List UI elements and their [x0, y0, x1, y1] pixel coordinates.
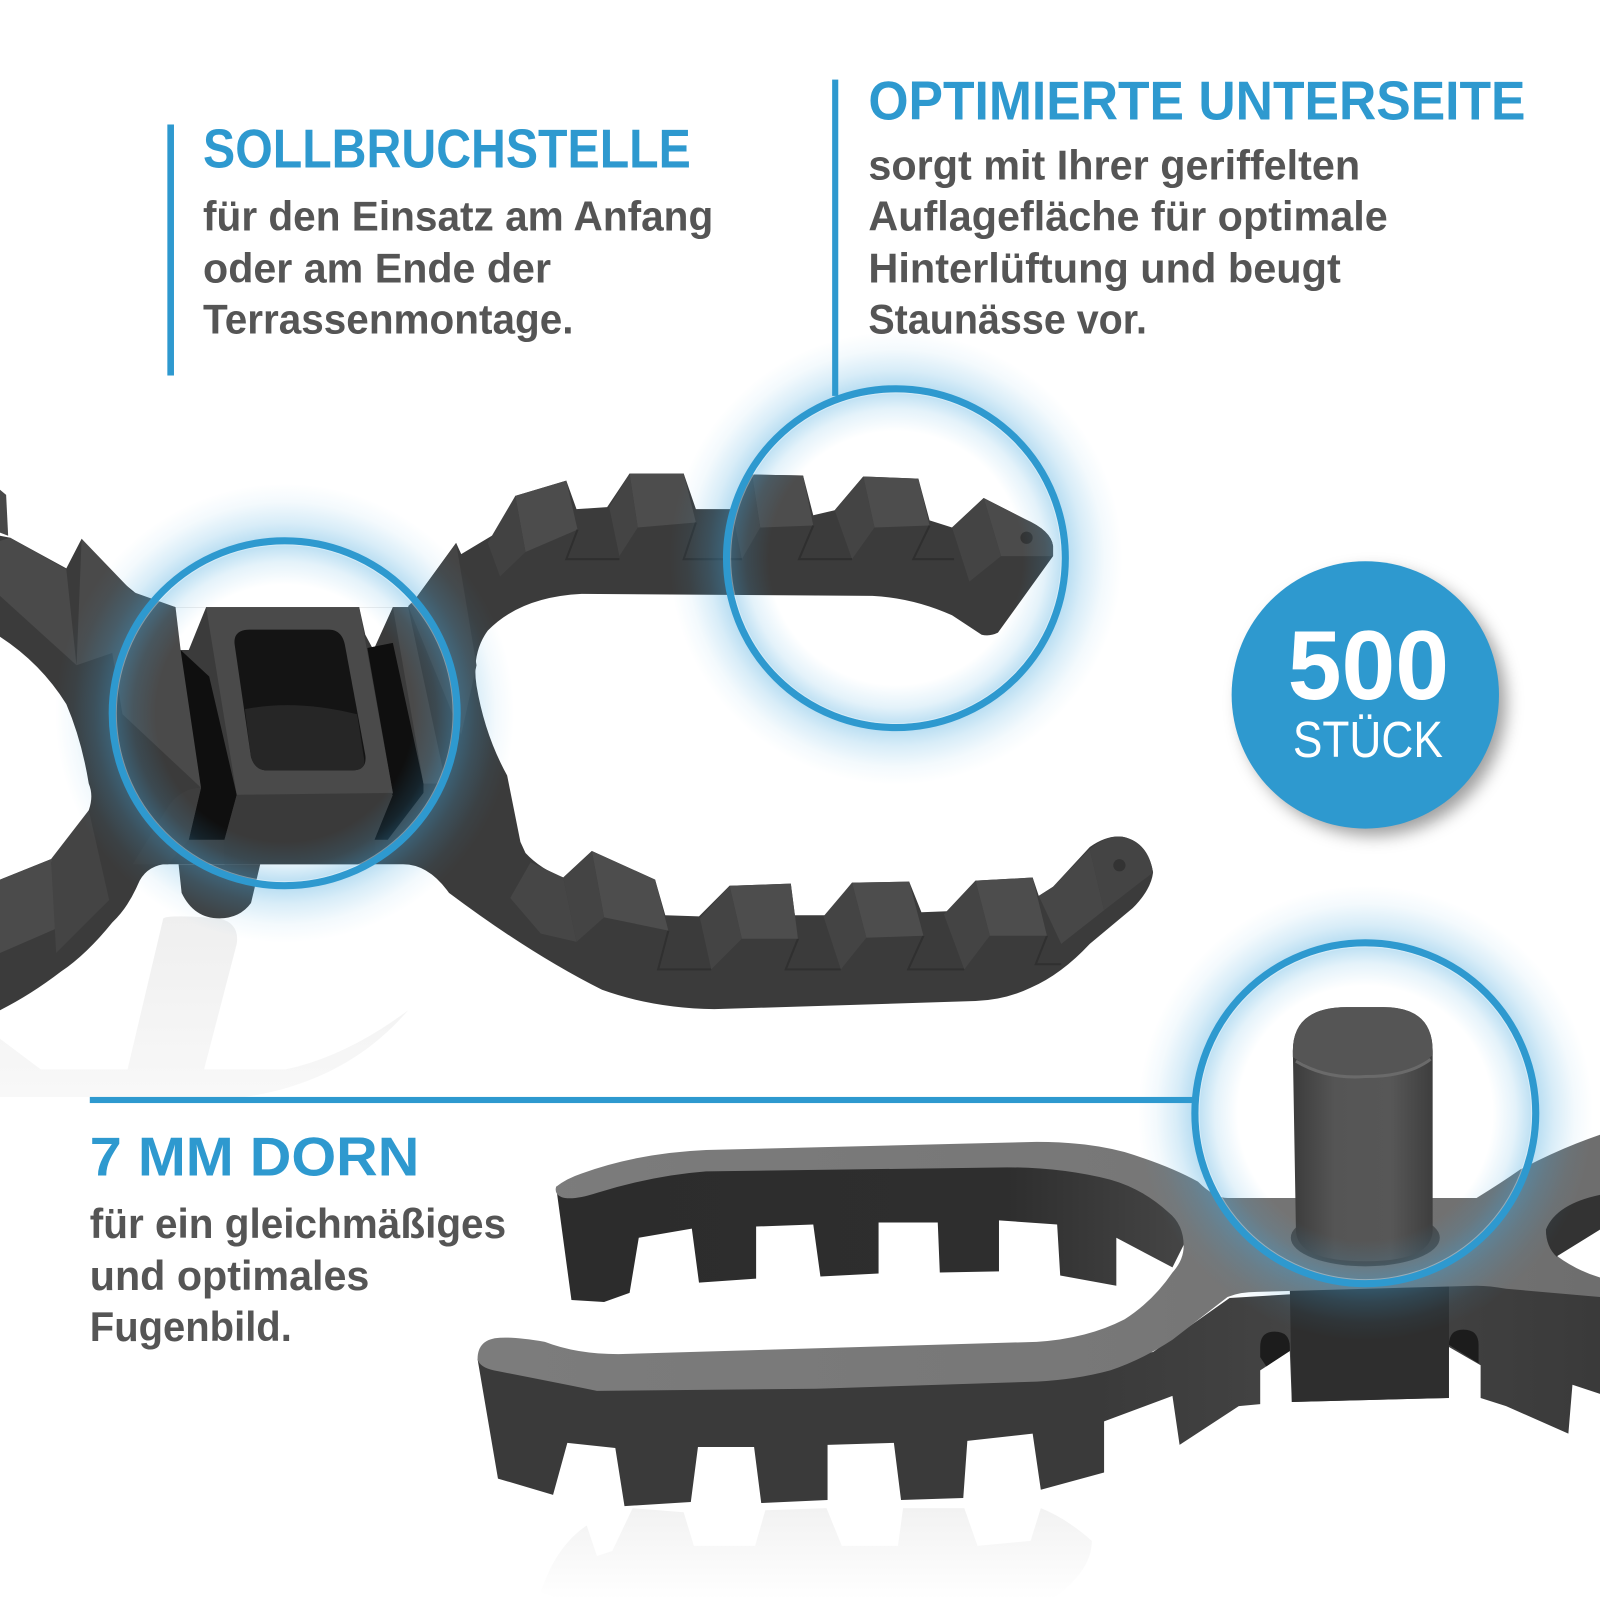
left ring teeth [0, 490, 201, 953]
accent bar [167, 124, 174, 376]
heading: OPTIMIERTE UNTERSEITE [868, 69, 1526, 131]
badge shadow [1241, 570, 1506, 836]
leader line [90, 1097, 1194, 1103]
body text: Staunässe vor. [868, 296, 1147, 343]
panel: upper spacer product [0, 473, 1153, 1010]
center block with cavities [133, 607, 446, 864]
panel: lower spacer product [478, 1007, 1600, 1506]
body text: Fugenbild. [90, 1303, 292, 1350]
body text [203, 193, 713, 343]
callout ring: Sollbruchstelle [55, 484, 514, 943]
badge number: 500 [1288, 610, 1449, 720]
callout: Sollbruchstelle [167, 117, 713, 376]
badge unit: STÜCK [1293, 711, 1443, 768]
prong inner wall with teeth [556, 1153, 1199, 1302]
body text: Terrassenmontage. [203, 296, 573, 343]
heading: 7 MM DORN [90, 1126, 419, 1188]
body text: oder am Ende der [203, 245, 551, 292]
top face [478, 1135, 1600, 1391]
locating pin below block [179, 864, 260, 918]
reflection of lower spacer [541, 1508, 1092, 1600]
callout ring: Optimierte Unterseite [669, 332, 1122, 785]
slots in outer wall [1260, 1330, 1479, 1366]
body text: Auflagefläche für optimale [868, 193, 1388, 240]
badge: 500 Stück [1232, 561, 1506, 836]
lower prong teeth [510, 836, 1153, 969]
badge disc [1232, 561, 1499, 829]
upper prong tip dimple [1020, 532, 1033, 544]
body text [90, 1200, 506, 1350]
right ring hole [1546, 1195, 1600, 1278]
body text: für ein gleichmäßiges [90, 1200, 506, 1247]
body text: für den Einsatz am Anfang [203, 193, 713, 240]
upper prong teeth [408, 473, 1053, 735]
lower prong tip dimple [1113, 859, 1126, 871]
center block face [1290, 1286, 1449, 1402]
body text: und optimales [90, 1252, 369, 1299]
callout: Optimierte Unterseite [832, 69, 1526, 396]
spacer body silhouette [0, 473, 1153, 1010]
heading: SOLLBRUCHSTELLE [203, 117, 691, 179]
body text: Hinterlüftung und beugt [868, 245, 1341, 292]
callout: 7 mm Dorn [90, 1097, 1194, 1350]
dowel pin [1291, 1007, 1440, 1266]
accent bar [832, 80, 838, 396]
callout ring: 7 mm Dorn [1138, 886, 1593, 1341]
body text: sorgt mit Ihrer geriffelten [868, 142, 1360, 189]
floor shadow of upper spacer [0, 916, 408, 1097]
outer wall with teeth [478, 1284, 1600, 1506]
body text [868, 142, 1388, 343]
